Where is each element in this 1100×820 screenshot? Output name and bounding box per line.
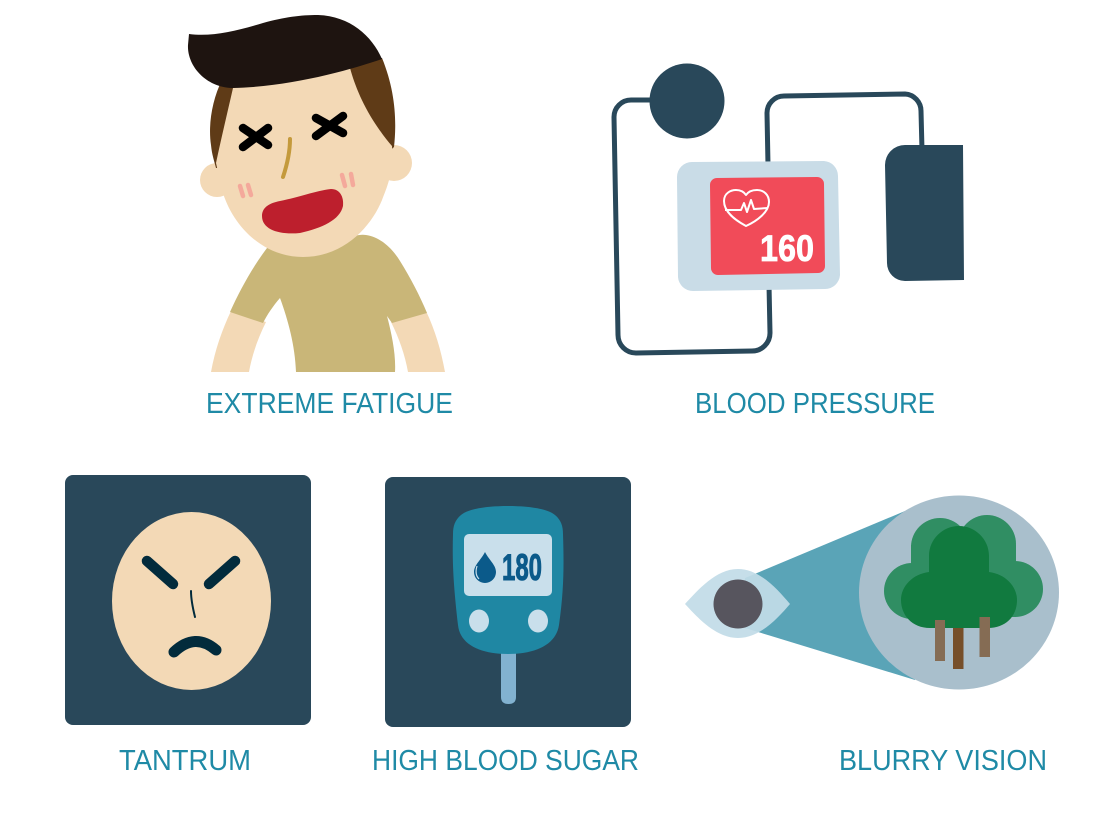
heart icon bbox=[724, 190, 769, 226]
lens circle bbox=[859, 496, 1059, 690]
panel: blood pressure bbox=[614, 64, 964, 420]
drop bbox=[474, 552, 496, 583]
panel: extreme fatigue bbox=[188, 15, 453, 420]
man eyes bbox=[243, 116, 343, 147]
monitor reading: 160 bbox=[760, 228, 814, 269]
face bbox=[112, 512, 271, 690]
monitor body bbox=[677, 161, 840, 291]
meter body bbox=[453, 506, 564, 654]
eye bbox=[685, 569, 790, 638]
heading: tantrum: TANTRUM bbox=[119, 745, 251, 777]
man nose bbox=[283, 139, 290, 177]
icon: blood pressure monitor bbox=[614, 64, 964, 353]
man blush bbox=[240, 174, 353, 196]
drop highlight bbox=[476, 566, 479, 579]
man hair top bbox=[188, 15, 382, 88]
reading: 180 bbox=[502, 547, 542, 588]
heading: high blood sugar: HIGH BLOOD SUGAR bbox=[372, 745, 639, 777]
pupil bbox=[714, 580, 762, 628]
man back hair bbox=[210, 58, 395, 168]
icon: glucose meter bbox=[385, 477, 631, 727]
icon: tired man bbox=[188, 15, 445, 372]
cuff bbox=[885, 145, 964, 281]
panel: blurry vision bbox=[685, 496, 1059, 777]
panel: tantrum bbox=[65, 475, 311, 777]
icon: angry face bbox=[65, 475, 311, 725]
left tube bbox=[614, 100, 770, 353]
test strip bbox=[501, 650, 516, 704]
tree front foliage bbox=[901, 526, 1017, 628]
panel: high blood sugar bbox=[372, 477, 639, 777]
man ears bbox=[200, 145, 412, 197]
meter screen bbox=[464, 534, 552, 596]
vision cone bbox=[745, 511, 915, 680]
heading: blood pressure: BLOOD PRESSURE bbox=[695, 388, 935, 420]
monitor screen bbox=[710, 177, 825, 275]
man face bbox=[216, 68, 392, 257]
heading: blurry vision: BLURRY VISION bbox=[839, 745, 1047, 777]
heading: extreme fatigue: EXTREME FATIGUE bbox=[206, 388, 453, 420]
man arms bbox=[211, 311, 445, 372]
tree back foliage bbox=[884, 515, 1043, 619]
man shirt bbox=[230, 235, 427, 372]
man mouth bbox=[262, 189, 343, 233]
tree trunks bbox=[935, 617, 990, 669]
right tube bbox=[767, 94, 922, 165]
brows bbox=[147, 561, 235, 584]
tile bbox=[385, 477, 631, 727]
nose bbox=[191, 591, 195, 617]
icon: eye and tree bbox=[685, 496, 1059, 690]
tile bbox=[65, 475, 311, 725]
mouth bbox=[174, 641, 216, 652]
bulb bbox=[650, 64, 724, 138]
buttons bbox=[469, 610, 548, 632]
